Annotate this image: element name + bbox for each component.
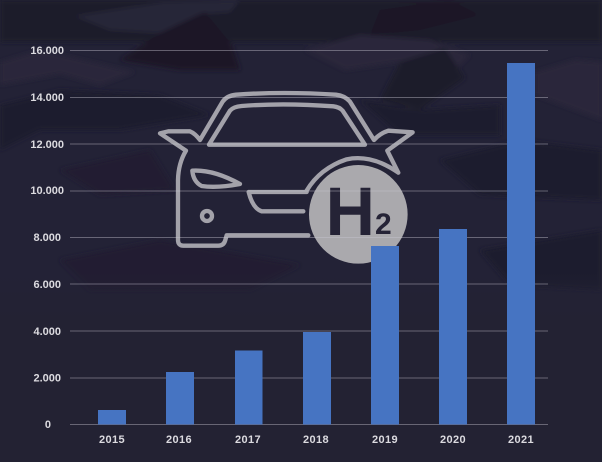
chart gridlines [70,50,548,424]
bar 2016 [166,372,194,424]
x axis labels [99,434,534,446]
bar 2021 [507,63,535,424]
y axis labels: 10.000 [30,185,64,197]
bar chart bars [98,63,535,424]
y axis labels: 16.000 [30,45,64,57]
car body outline [160,93,413,246]
hydrogen badge: H [326,174,375,250]
icon: hydrogen car [160,93,413,264]
hydrogen badge [309,165,408,264]
y axis labels: 6.000 [33,279,61,291]
x axis labels: 2017 [235,434,261,446]
fog lamp [202,211,212,221]
bar 2015 [98,410,126,424]
bar 2019 [371,246,399,424]
x axis labels: 2019 [372,434,398,446]
y axis labels [30,45,64,431]
x axis labels: 2018 [303,434,329,446]
windscreen [209,104,365,145]
x axis labels: 2021 [508,434,534,446]
x axis labels: 2016 [166,434,192,446]
x axis labels: 2015 [99,434,125,446]
bar 2018 [303,332,331,424]
hydrogen badge: 2 [375,208,392,241]
y axis labels: 12.000 [30,139,64,151]
grille [249,192,307,211]
headlight [192,171,240,187]
x axis labels: 2020 [440,434,466,446]
bar 2020 [439,229,467,424]
y axis labels: 4.000 [33,326,61,338]
bar 2017 [235,350,262,424]
y axis labels: 8.000 [33,232,61,244]
y axis labels: 2.000 [33,372,61,384]
y axis labels: 14.000 [30,92,64,104]
y axis labels: 0 [45,419,51,431]
